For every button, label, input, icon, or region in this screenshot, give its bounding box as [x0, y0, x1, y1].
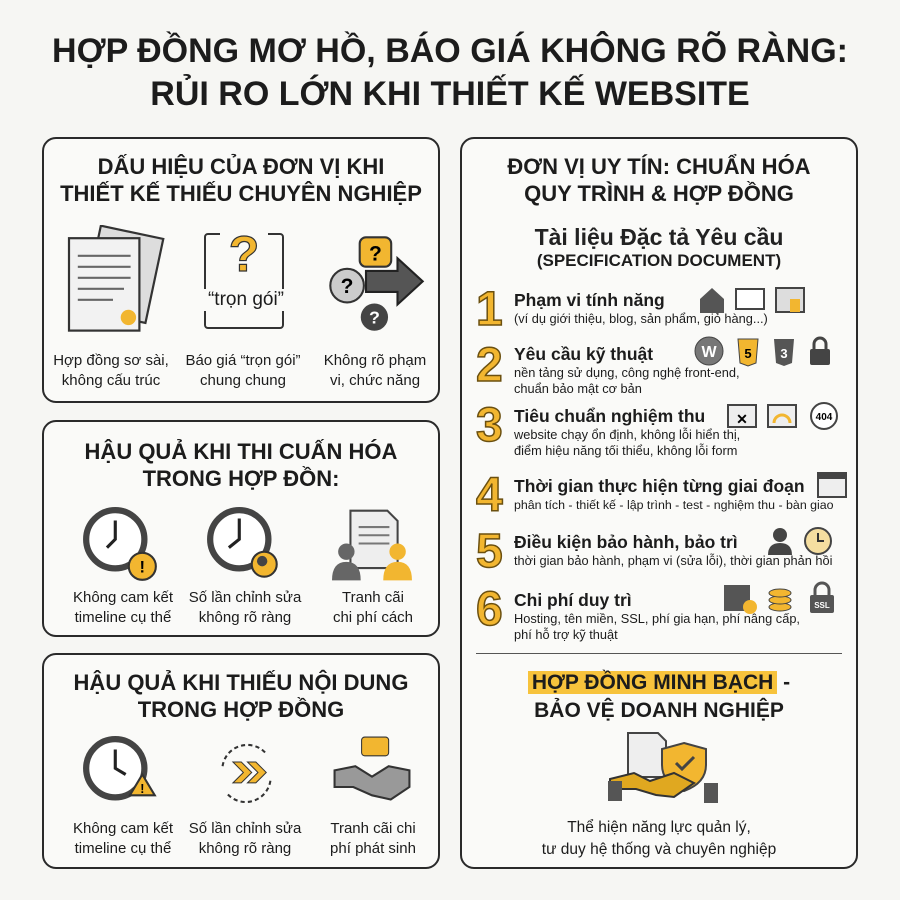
- heading: ĐƠN VỊ UY TÍN: CHUẨN HÓA: [507, 154, 811, 179]
- item 3: website chạy ổn định, không lỗi hiển thị,: [514, 427, 740, 442]
- label: Không cam kết: [73, 589, 173, 606]
- heading: DẤU HIỆU CỦA ĐƠN VỊ KHI: [98, 154, 384, 179]
- item 5: Điều kiện bảo hành, bảo trì: [514, 532, 738, 552]
- label: timeline cụ thể: [75, 609, 171, 626]
- item 2: 2: [476, 339, 503, 392]
- heading: TRONG HỢP ĐỒN:: [143, 466, 339, 491]
- label: [53, 352, 169, 389]
- icon: documents: [68, 225, 165, 332]
- item 6: Chi phí duy trì: [514, 590, 632, 610]
- conclusion text: Thể hiện năng lực quản lý,: [567, 819, 751, 836]
- item 5: thời gian bảo hành, phạm vi (sửa lỗi), thời gian phản hồi: [514, 553, 832, 568]
- panel: signs: [42, 137, 440, 403]
- icon: clock warning: [83, 507, 157, 581]
- label: [189, 589, 302, 626]
- heading: QUY TRÌNH & HỢP ĐỒNG: [524, 181, 794, 206]
- label: không rõ ràng: [199, 609, 291, 626]
- panel: reputable: (SPECIFICATION DOCUMENT): [537, 251, 781, 270]
- item 2: 3: [780, 346, 788, 361]
- item 6: [476, 582, 834, 642]
- item 3: [476, 399, 838, 458]
- heading: HẬU QUẢ KHI THI CUẤN HÓA: [85, 439, 397, 464]
- heading: [60, 154, 422, 206]
- label: Tranh cãi chi: [330, 820, 416, 837]
- subheading: Tài liệu Đặc tả Yêu cầu: [535, 224, 783, 250]
- label: không cấu trúc: [62, 372, 160, 389]
- label: Tranh cãi: [342, 589, 404, 606]
- label: Số lần chỉnh sửa: [189, 820, 301, 837]
- panel: reputable: [460, 137, 858, 869]
- icon: cracked clock: !: [140, 782, 144, 796]
- item 2: 5: [744, 346, 752, 361]
- item 1: 1: [476, 283, 503, 336]
- icon: handshake shield: [608, 732, 718, 803]
- conclusion heading: HỢP ĐỒNG MINH BẠCH -: [532, 671, 790, 694]
- icon: tron goi: [204, 233, 284, 329]
- label: chi phí cách: [333, 609, 413, 626]
- label: phí phát sinh: [330, 840, 416, 857]
- label: [324, 352, 426, 389]
- icon: clock warning: !: [140, 558, 145, 577]
- icon: revision arrows: [222, 744, 272, 803]
- label: Số lần chỉnh sửa: [189, 589, 301, 606]
- item 3: điểm hiệu năng tối thiểu, không lỗi form: [514, 443, 737, 458]
- conclusion text: [542, 819, 776, 858]
- label: không rõ ràng: [199, 840, 291, 857]
- conclusion heading: [528, 670, 790, 722]
- item 4: 4: [476, 469, 503, 522]
- label: Không cam kết: [73, 820, 173, 837]
- icon: question arrow: ?: [341, 275, 354, 298]
- icon: handshake chat: [334, 736, 410, 801]
- item 2: chuẩn bảo mật cơ bản: [514, 381, 642, 396]
- heading: THIẾT KẾ THIẾU CHUYÊN NGHIỆP: [60, 181, 422, 206]
- heading: [74, 670, 408, 722]
- label: vi, chức năng: [330, 372, 420, 389]
- icon: question arrow: ?: [369, 307, 380, 327]
- item 6: Hosting, tên miền, SSL, phí gia hạn, phí nâng cấp,: [514, 611, 800, 626]
- heading: [507, 154, 811, 206]
- title: [52, 31, 848, 113]
- item 6: 6: [476, 583, 503, 636]
- item 1: [476, 283, 805, 336]
- label: [73, 820, 173, 857]
- label: [73, 589, 173, 626]
- item 3: ✕: [736, 411, 748, 427]
- heading: [85, 439, 397, 491]
- icon: tron goi: ?: [229, 226, 259, 282]
- icon: question arrow: ?: [369, 242, 382, 265]
- item 1: (ví dụ giới thiệu, blog, sản phẩm, giỏ hàng...): [514, 311, 768, 326]
- icon: question arrow: [329, 236, 424, 331]
- icon: dispute document: [332, 510, 412, 580]
- conclusion text: tư duy hệ thống và chuyên nghiệp: [542, 841, 776, 858]
- label: Hợp đồng sơ sài,: [53, 352, 169, 369]
- icon: clock redo: [207, 507, 278, 578]
- item 2: [476, 336, 830, 396]
- panel: consequences 2: [42, 653, 440, 869]
- label: chung chung: [200, 372, 286, 389]
- item 2: Yêu cầu kỹ thuật: [514, 344, 653, 364]
- item 2: W: [701, 344, 717, 361]
- label: [333, 589, 413, 626]
- item 4: [476, 469, 847, 522]
- label: timeline cụ thể: [75, 840, 171, 857]
- panel: consequences 1: [42, 420, 440, 637]
- label: [185, 352, 301, 389]
- item 5: 5: [476, 525, 503, 578]
- label: Không rõ phạm: [324, 352, 426, 369]
- item 4: phân tích - thiết kế - lập trình - test - nghiệm thu - bàn giao: [514, 498, 834, 512]
- icon: tron goi: “trọn gói”: [208, 289, 284, 310]
- item 6: SSL: [814, 601, 830, 610]
- item 5: [476, 525, 832, 578]
- label: Báo giá “trọn gói”: [185, 352, 301, 369]
- label: [189, 820, 302, 857]
- item 6: phí hỗ trợ kỹ thuật: [514, 627, 618, 642]
- title: RỦI RO LỚN KHI THIẾT KẾ WEBSITE: [150, 75, 750, 113]
- item 2: nền tảng sử dụng, công nghệ front-end,: [514, 365, 740, 380]
- icon: cracked clock: [83, 736, 157, 800]
- item 3: Tiêu chuẩn nghiệm thu: [514, 406, 705, 426]
- item 4: Thời gian thực hiện từng giai đoạn: [514, 476, 805, 496]
- item 1: Phạm vi tính năng: [514, 290, 665, 310]
- item 3: 3: [476, 399, 503, 452]
- title: HỢP ĐỒNG MƠ HỒ, BÁO GIÁ KHÔNG RÕ RÀNG:: [52, 32, 848, 70]
- label: [330, 820, 416, 857]
- conclusion heading: BẢO VỆ DOANH NGHIỆP: [534, 699, 784, 722]
- item 3: 404: [816, 412, 833, 423]
- heading: TRONG HỢP ĐỒNG: [138, 697, 344, 722]
- heading: HẬU QUẢ KHI THIẾU NỘI DUNG: [74, 670, 408, 695]
